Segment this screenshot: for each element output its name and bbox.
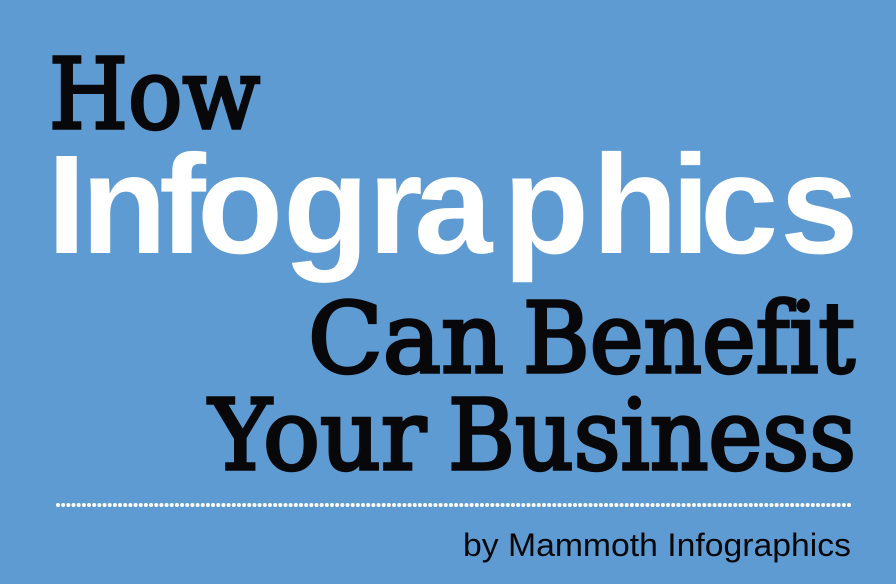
title: Can Benefit xyxy=(308,282,855,395)
dotted divider xyxy=(58,503,850,507)
title: Can Benefit: Benefit xyxy=(523,282,855,395)
title: Your Business: Your xyxy=(207,379,427,492)
title: Your Business xyxy=(207,379,856,492)
title: Can Benefit: Can xyxy=(308,282,504,395)
byline: by Mammoth Infographics xyxy=(463,527,851,563)
title: Your Business: Business xyxy=(448,379,856,492)
title: How: How xyxy=(49,38,260,151)
title: Infographics: Infographics xyxy=(47,125,858,283)
